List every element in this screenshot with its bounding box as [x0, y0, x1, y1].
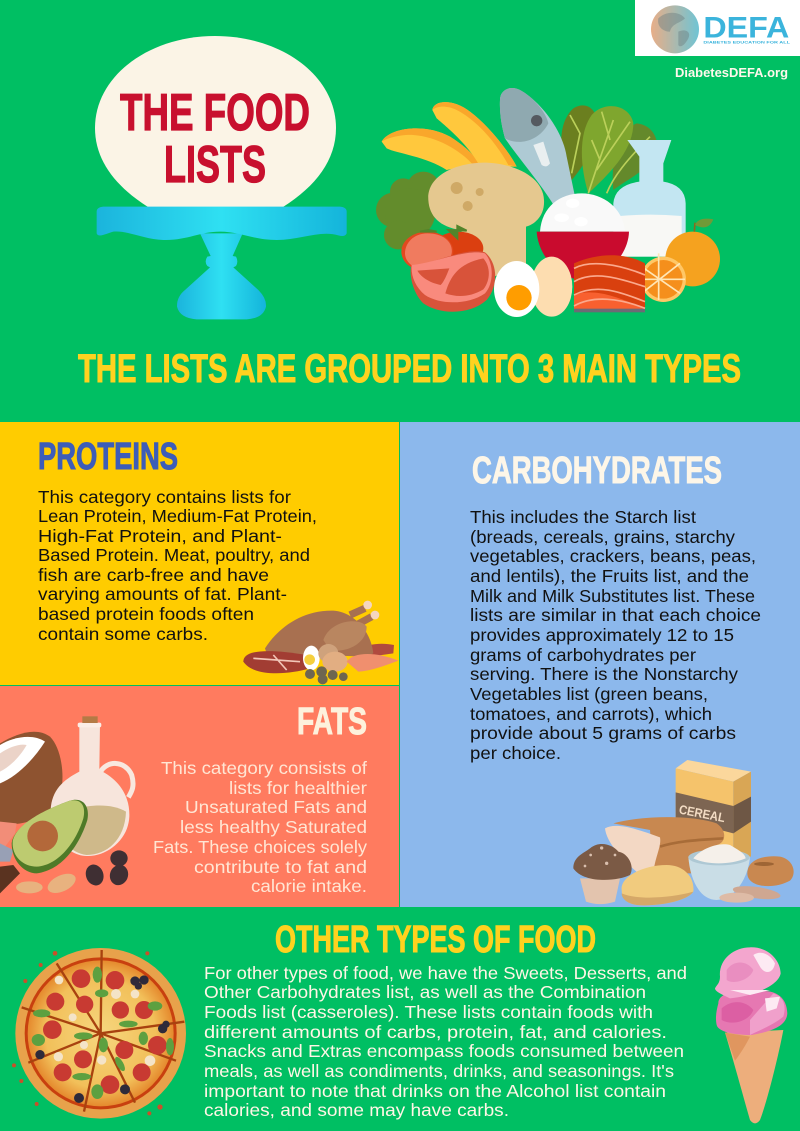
text: proteins body: varying amounts of fat. Plant- — [38, 584, 287, 604]
text: carbohydrates body: per choice. — [470, 743, 561, 763]
text: proteins body: based protein foods often — [38, 604, 254, 624]
icon: poultry, steak, egg and salmon — [243, 601, 398, 684]
text: other types body: meals, as well as condiments, drinks, and seasonings. It's — [204, 1061, 674, 1081]
text: proteins body: High-Fat Protein, and Plant- — [38, 526, 282, 546]
salmon — [574, 255, 645, 312]
text: carbohydrates body: and lentils), the Fruits list, and the — [470, 566, 749, 586]
text: carbohydrates body: This includes the Starch list — [470, 507, 696, 527]
text: other types body: important to note that drinks on the Alcohol list contain — [204, 1081, 666, 1101]
meat — [411, 251, 495, 312]
text: other types body: For other types of food, we have the Sweets, Desserts, and — [204, 963, 687, 983]
icon: cereal, bread, muffin and bowl: CEREAL — [678, 803, 726, 825]
text: carbohydrates body: Milk and Milk Substitutes list. These — [470, 586, 755, 606]
text: fats body: Unsaturated Fats and — [185, 797, 367, 817]
text: fats body: contribute to fat and — [194, 857, 367, 877]
rice bowl — [537, 193, 629, 280]
title on cake stand — [95, 36, 347, 319]
text: carbohydrates body — [470, 507, 761, 763]
text: proteins body — [38, 487, 317, 644]
text: other types body: Snacks and Extras encompass foods consumed between — [204, 1041, 684, 1061]
orange — [640, 219, 720, 302]
text: proteins body: fish are carb-free and have — [38, 565, 269, 585]
icon: ice cream cone — [715, 947, 787, 1123]
milk bottle — [613, 140, 686, 257]
panel: carbohydrates — [400, 422, 800, 907]
heading: fats: FATS — [297, 701, 367, 743]
text: other types body — [204, 963, 687, 1120]
text: carbohydrates body: vegetables, crackers, beans, peas, — [470, 546, 756, 566]
text: carbohydrates body: grams of carbohydrates per — [470, 645, 696, 665]
website link: DiabetesDEFA.org — [675, 66, 788, 80]
logo: DEFA — [635, 0, 800, 56]
logo: DEFA: DEFA — [703, 11, 789, 44]
text: fats body: This category consists of — [161, 758, 367, 778]
panel: proteins — [0, 422, 399, 685]
text: carbohydrates body: Vegetables list (green beans, — [470, 684, 708, 704]
title plate oval — [95, 36, 336, 207]
text: carbohydrates body: provides approximately 12 to 15 — [470, 625, 734, 645]
text: fats body — [153, 758, 367, 896]
text: fats body: lists for healthier — [229, 778, 367, 798]
text: proteins body: Lean Protein, Medium-Fat Protein, — [38, 506, 317, 526]
text: proteins body: contain some carbs. — [38, 624, 208, 644]
text: carbohydrates body: (breads, cereals, grains, starchy — [470, 527, 735, 547]
text: fats body: calorie intake. — [251, 876, 367, 896]
heading: other types of food: OTHER TYPES OF FOOD — [275, 919, 596, 961]
text: other types body: different amounts of carbs, protein, fat, and calories. — [204, 1022, 667, 1042]
text: other types body: Other Carbohydrates list, as well as the Combination — [204, 982, 646, 1002]
text: proteins body: This category contains lists for — [38, 487, 291, 507]
title — [120, 84, 310, 194]
bread — [428, 163, 544, 277]
icon: coconut, oil, avocado and nuts — [0, 716, 133, 897]
title: THE FOOD — [120, 84, 310, 142]
tomatoes — [401, 226, 483, 272]
icon: cake stand — [97, 207, 347, 319]
text: other types body: calories, and some may have carbs. — [204, 1100, 509, 1120]
text: fats body: less healthy Saturated — [180, 817, 367, 837]
text: fats body: Fats. These choices solely — [153, 837, 367, 857]
fish — [500, 88, 575, 210]
leaves — [561, 105, 657, 193]
text: carbohydrates body: lists are similar in that each choice — [470, 605, 761, 625]
bananas — [382, 102, 517, 170]
icon: cereal, bread, muffin and bowl — [573, 760, 794, 905]
text: carbohydrates body: serving. There is the Nonstarchy — [470, 664, 738, 684]
eggs — [494, 257, 572, 317]
icon: globe — [651, 5, 699, 53]
text: carbohydrates body: tomatoes, and carrots), which — [470, 704, 712, 724]
food illustration group — [376, 88, 720, 317]
title: LISTS — [164, 136, 266, 194]
panel: fats — [0, 686, 399, 907]
text: carbohydrates body: provide about 5 grams of carbs — [470, 723, 736, 743]
text: other types body: Foods list (casseroles). These lists contain foods with — [204, 1002, 653, 1022]
text: proteins body: Based Protein. Meat, poultry, and — [38, 545, 310, 565]
lettuce — [376, 172, 440, 249]
logo: DEFA: DIABETES EDUCATION FOR ALL — [703, 40, 791, 45]
icon: pizza — [12, 948, 186, 1119]
heading: proteins: PROTEINS — [38, 436, 178, 478]
